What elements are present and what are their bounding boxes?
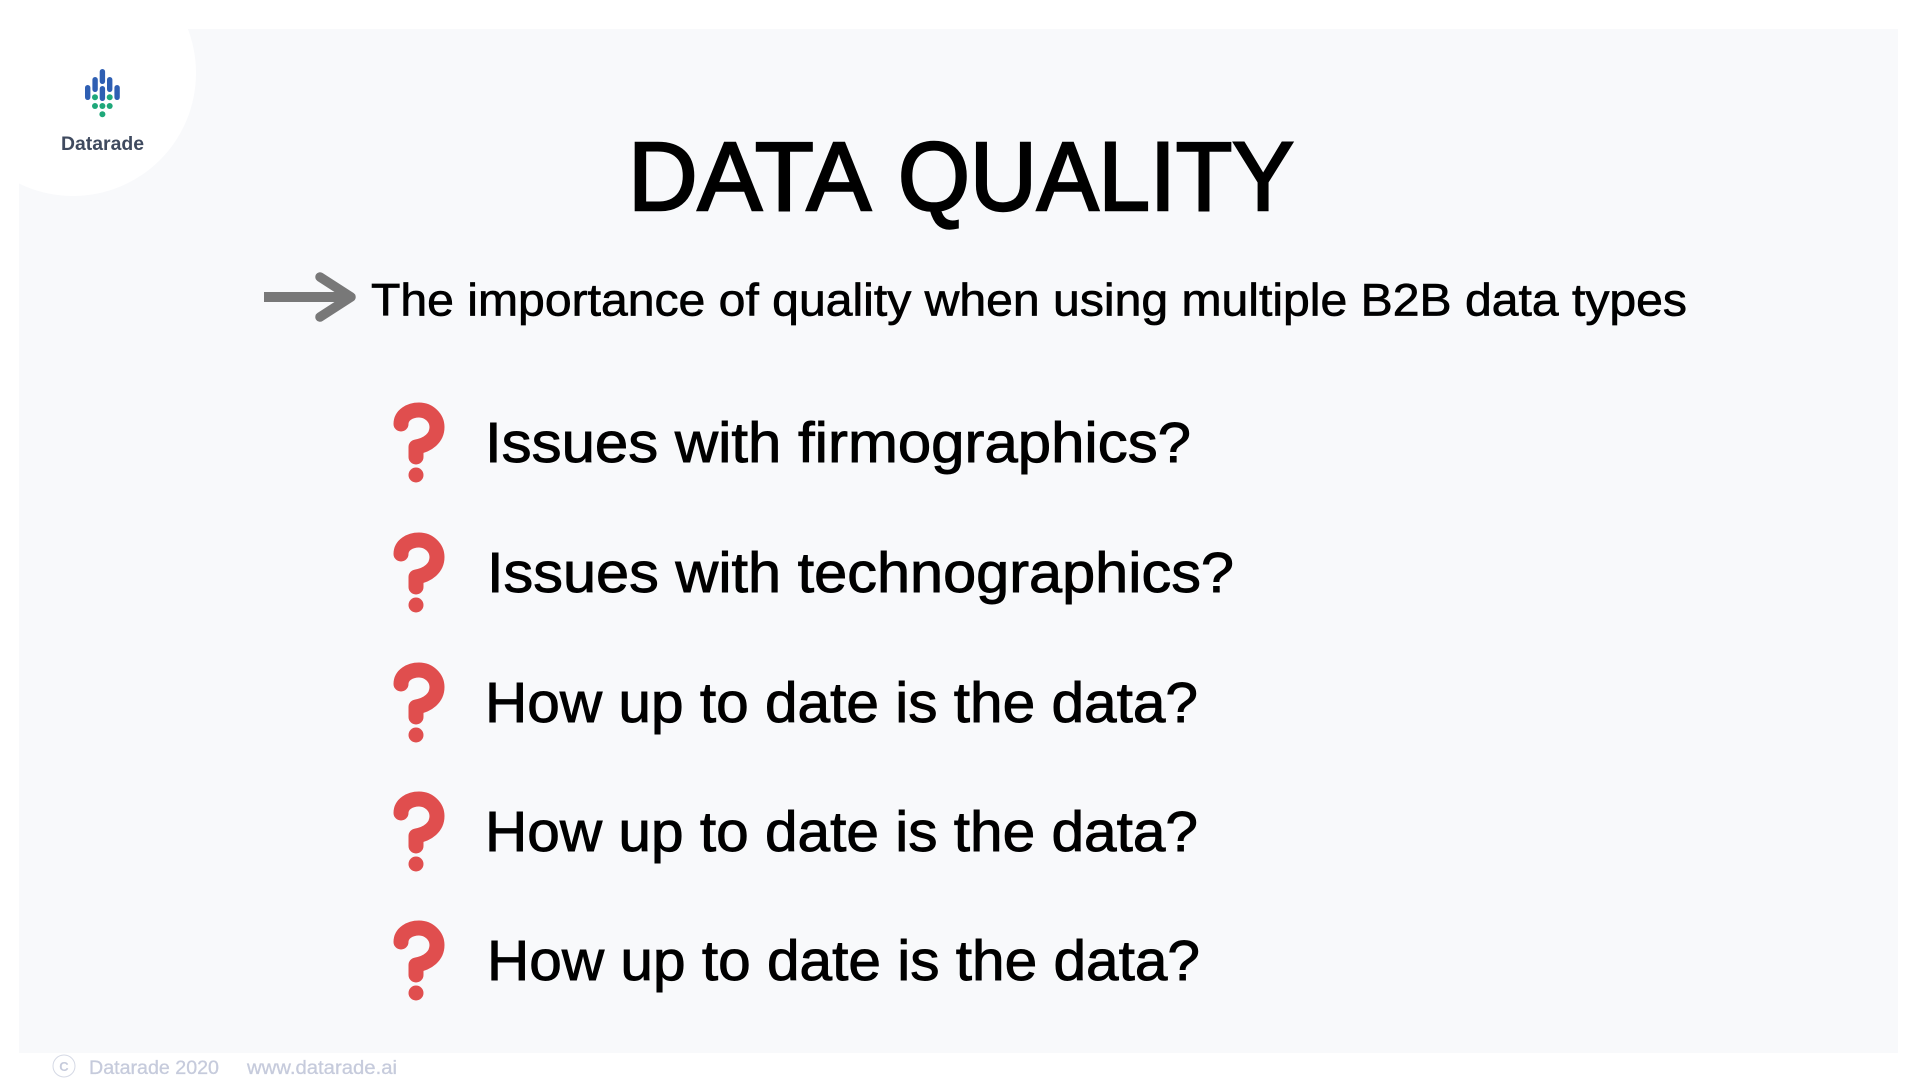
logo corner circle <box>0 0 196 196</box>
icon: arrow <box>264 277 351 317</box>
item text: How up to date is the data? <box>485 671 1198 735</box>
item text: How up to date is the data? <box>485 800 1198 864</box>
icon: question mark <box>401 410 437 482</box>
list item: up to date 3 <box>401 928 1200 1000</box>
footer url: www.datarade.ai <box>246 1058 397 1079</box>
title <box>628 122 1294 231</box>
icon: copyright <box>53 1055 75 1077</box>
list item: technographics <box>401 540 1234 612</box>
list item: up to date 1 <box>401 670 1198 742</box>
icon: question mark <box>401 540 437 612</box>
title: DATA <box>628 122 871 231</box>
item text: Issues with firmographics? <box>485 411 1191 475</box>
title: QUALITY <box>898 122 1294 231</box>
item text: How up to date is the data? <box>487 929 1200 993</box>
icon: question mark <box>401 799 437 872</box>
list item: firmographics <box>401 410 1191 482</box>
footer credit: Datarade 2020 <box>89 1058 219 1079</box>
subtitle: The importance of quality when using multiple B2B data types <box>371 274 1687 326</box>
logo wordmark: Datarade <box>61 134 144 155</box>
icon: question mark <box>401 928 437 1000</box>
logo: Datarade <box>61 69 144 155</box>
footer <box>53 1055 397 1079</box>
icon: question mark <box>401 670 437 742</box>
list item: up to date 2 <box>401 799 1198 872</box>
icon: logo bars and dots <box>85 69 120 117</box>
item text: Issues with technographics? <box>487 541 1234 605</box>
icon: copyright: C <box>59 1059 69 1074</box>
